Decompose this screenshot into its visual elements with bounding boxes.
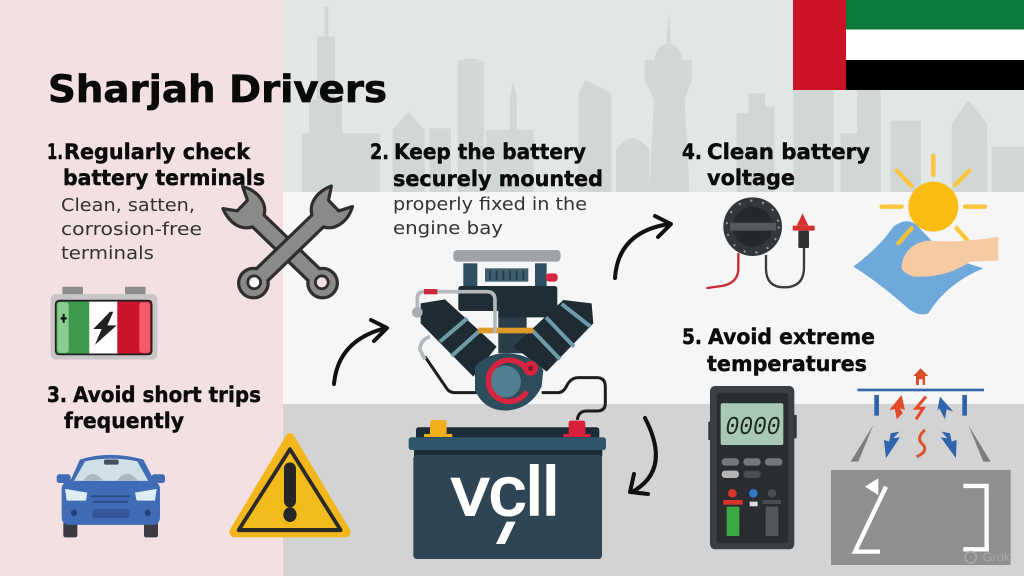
step 2 text: properly fixed in the — [393, 195, 587, 215]
title: Sharjah Drivers — [48, 68, 387, 111]
step 4 text: voltage — [707, 166, 795, 191]
arrow: to battery — [630, 418, 656, 494]
gray box with white brackets: Grok — [983, 551, 1011, 565]
step 3 text: frequently — [64, 409, 184, 434]
icon: warning triangle — [234, 438, 346, 532]
step 2 text: engine bay — [393, 219, 503, 239]
step 2 text: securely mounted — [393, 167, 603, 192]
step 1 text: Clean, satten, — [61, 196, 195, 216]
step 1 text: terminals — [61, 244, 154, 264]
step 1 text: Regularly check — [64, 140, 251, 165]
icon: multimeter dial and probes — [707, 197, 815, 288]
icon: engine — [412, 250, 605, 420]
step 2 text: Keep the battery — [394, 140, 586, 165]
step 4 text — [682, 140, 870, 191]
icon: digital multimeter: 0000 — [725, 412, 780, 442]
step 5 text: temperatures — [707, 352, 867, 377]
step 5 text — [682, 325, 875, 377]
icon: crossed wrenches — [220, 183, 356, 307]
arrow: to step 4 — [615, 216, 671, 278]
step 2 text: 2. — [370, 140, 389, 165]
icon: digital multimeter — [708, 386, 797, 549]
step 5 text: Avoid extreme — [708, 325, 875, 350]
step 3 text: 3. — [47, 383, 67, 408]
icon: large battery: vcll — [452, 454, 559, 530]
skyline silhouette — [302, 7, 1024, 192]
icon: small battery — [51, 287, 157, 360]
step 4 text: 4. — [682, 140, 702, 165]
step 3 text: Avoid short trips — [73, 383, 261, 408]
step 5 text: 5. — [682, 325, 702, 350]
step 1 text: corrosion-free — [61, 220, 202, 240]
icon: large battery — [409, 420, 606, 559]
step 1 text: 1. — [47, 140, 63, 165]
flag — [793, 0, 1024, 90]
arrow: to engine — [334, 320, 387, 384]
gray box with white brackets — [831, 470, 1011, 565]
step 4 text: Clean battery — [707, 140, 870, 165]
step 1 text — [47, 140, 265, 264]
step 2 text — [370, 140, 603, 239]
icon: blue car — [57, 455, 165, 537]
step 1 text: battery terminals — [63, 166, 265, 191]
icon: sun and cloth with hand — [853, 156, 998, 314]
step 3 text — [47, 383, 261, 434]
diagram: temperature flow — [851, 368, 991, 462]
